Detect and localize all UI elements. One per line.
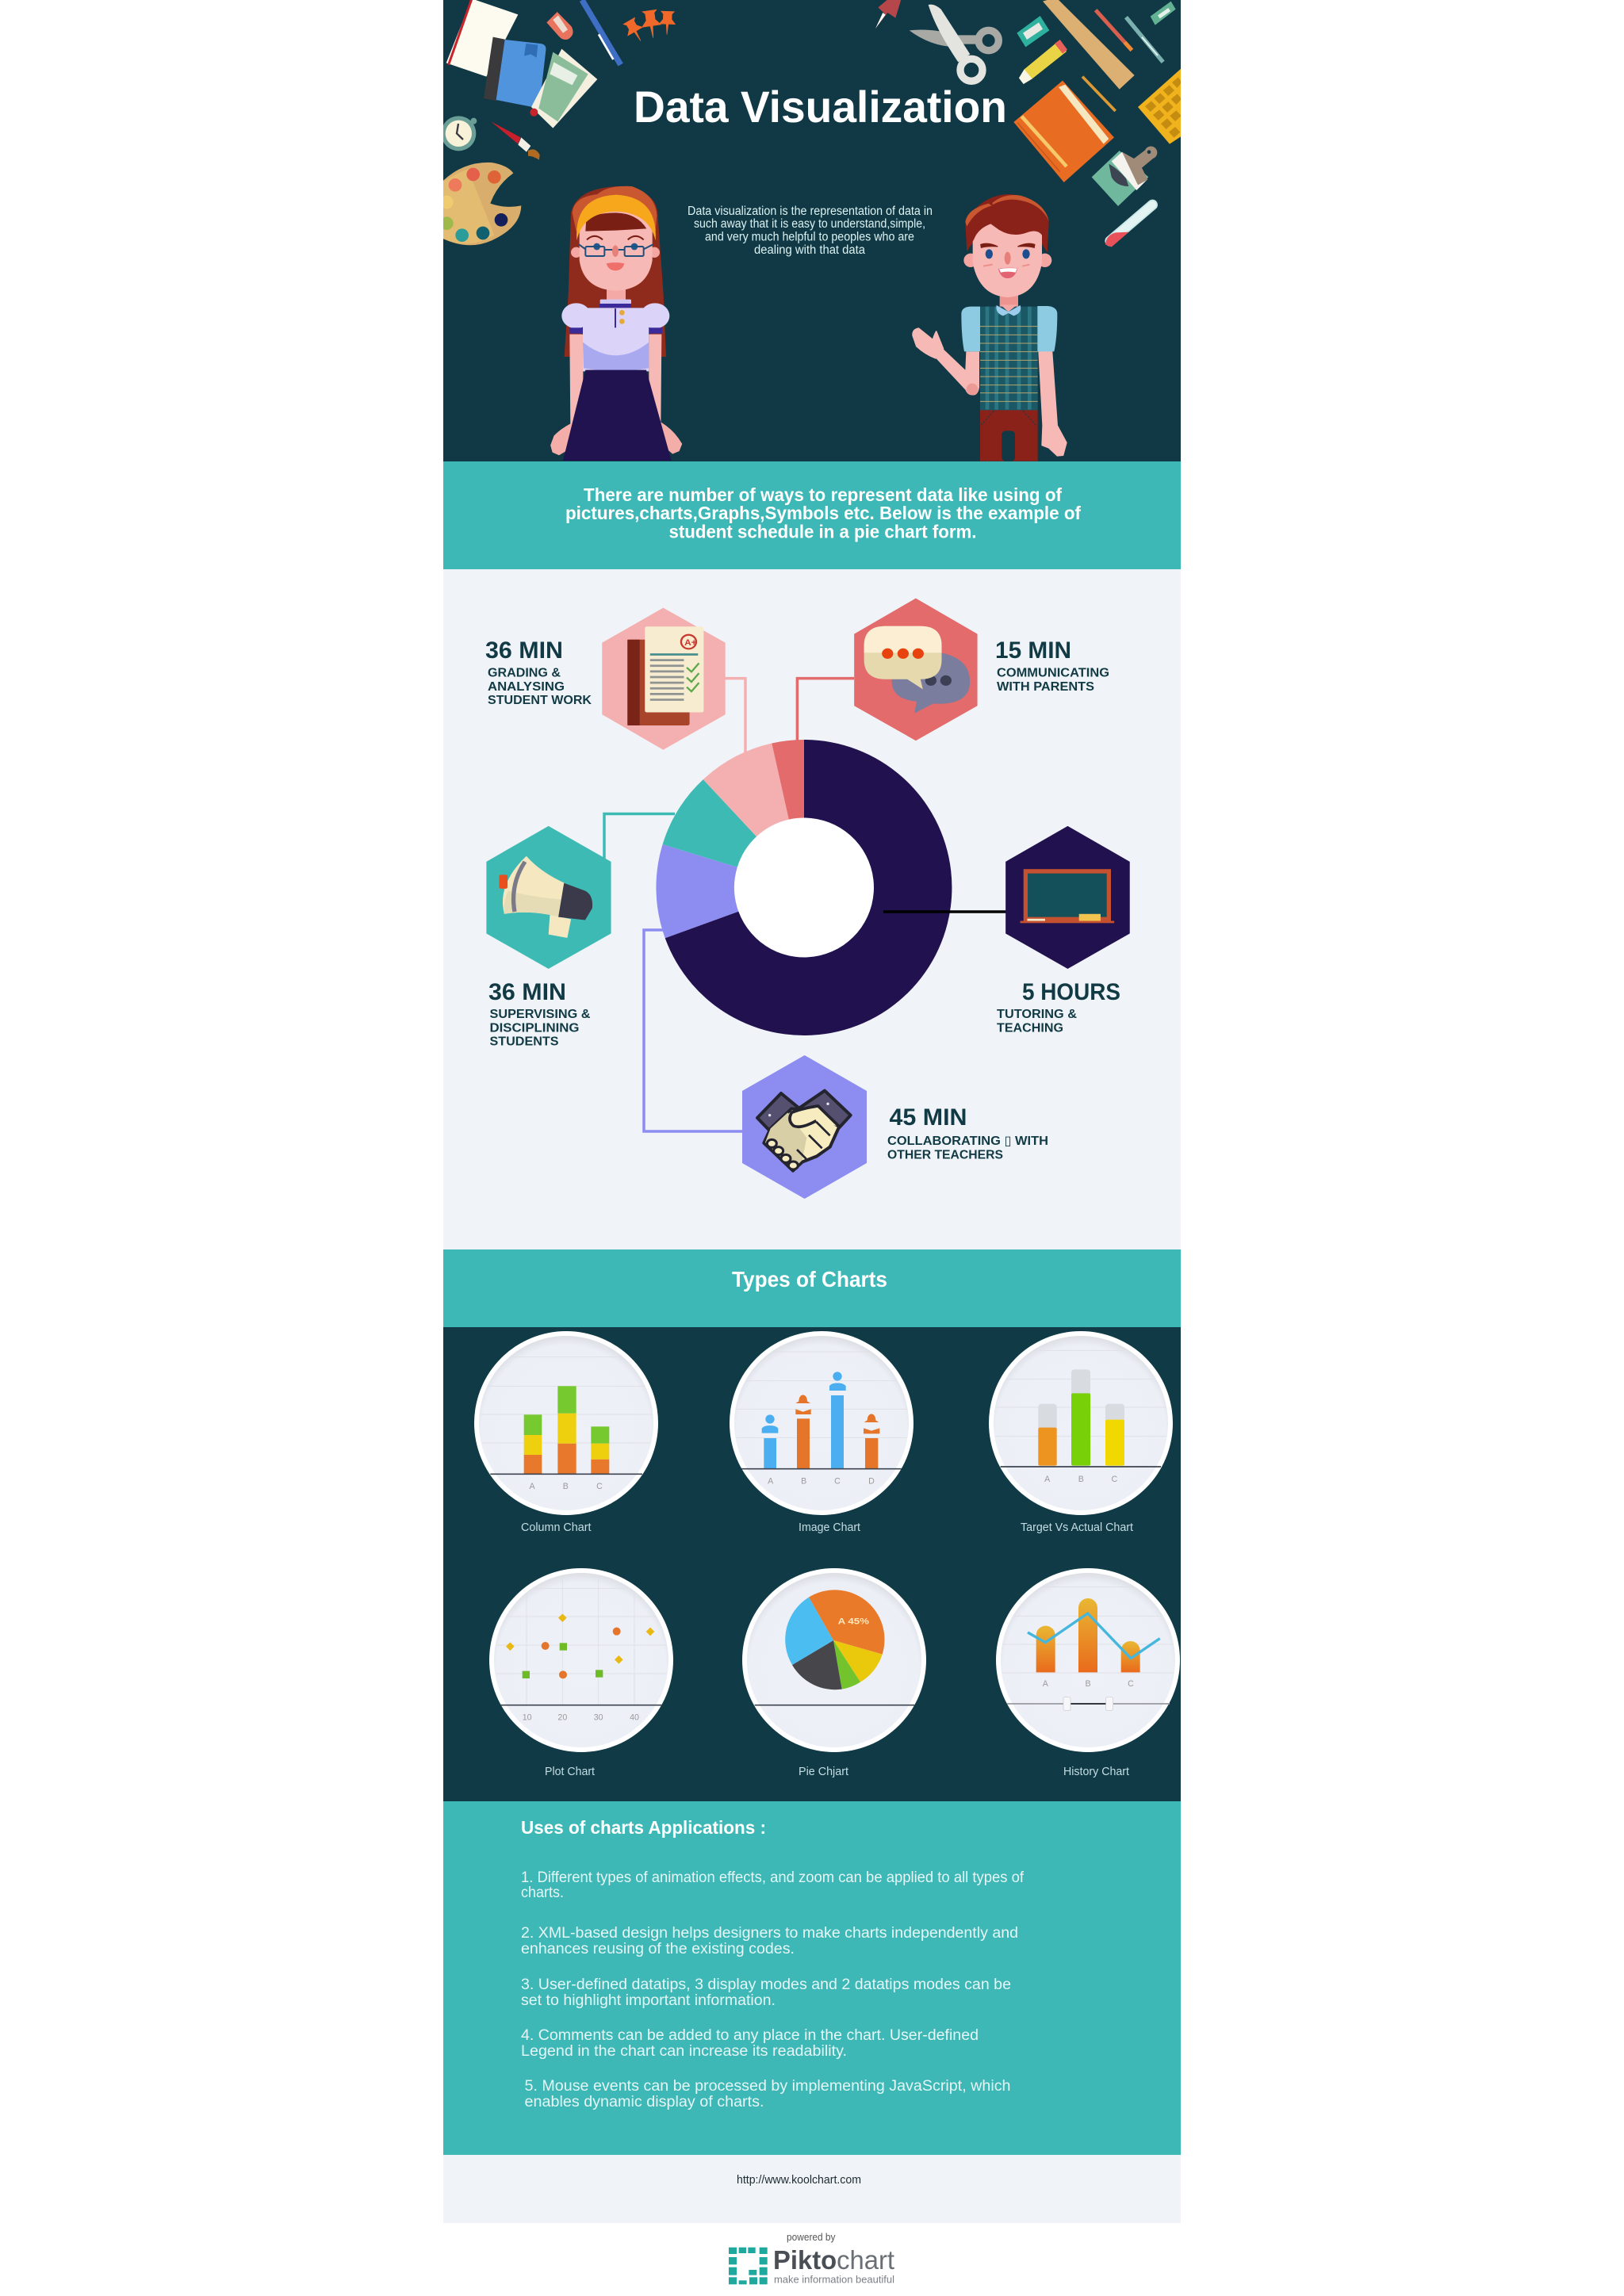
chart caption: Target Vs Actual Chart (1021, 1521, 1134, 1534)
uses list: 5. Mouse events can be processed by implementing JavaScript, which (525, 2078, 1010, 2095)
uses list: charts. (521, 1885, 564, 1901)
label: collaborating: COLLABORATING ▯ WITH (887, 1135, 1048, 1148)
uses list: 2. XML-based design helps designers to make charts independently and (521, 1925, 1018, 1942)
chart: history: C (1128, 1679, 1134, 1689)
chart: plot: 10 (523, 1712, 532, 1722)
icons: top-left stationery (440, 0, 676, 245)
label: collaborating: 45 MIN (890, 1104, 967, 1131)
hexagon: grading icon: A+ (684, 638, 697, 648)
uses list: 4. Comments can be added to any place in the chart. User-defined (521, 2027, 979, 2044)
piktochart branding: powered by (787, 2232, 836, 2243)
chart: image: C (834, 1476, 841, 1486)
panel: types of charts heading band (443, 1249, 1181, 1327)
chart caption: Column Chart (521, 1521, 592, 1534)
hexagon: teaching icon (1005, 826, 1130, 969)
hexagon: grading icon (602, 608, 726, 750)
label: grading: STUDENT WORK (488, 694, 592, 707)
chart: history (996, 1568, 1180, 1752)
chart caption: History Chart (1063, 1766, 1129, 1778)
piktochart branding (729, 2232, 894, 2285)
panel: student schedule donut (443, 569, 1181, 1249)
label: teaching: 5 HOURS (1022, 979, 1120, 1005)
donut hole (734, 818, 874, 958)
panel: uses of charts (443, 1801, 1181, 2155)
label: grading: GRADING & (488, 666, 561, 680)
label: supervising (488, 979, 591, 1048)
donut chart (656, 740, 952, 1035)
intro text: student schedule in a pie chart form. (669, 522, 977, 542)
chart: plot (489, 1568, 673, 1752)
uses list: Legend in the chart can increase its readability. (521, 2043, 847, 2060)
label: collaborating: OTHER TEACHERS (887, 1148, 1003, 1162)
label: teaching: TEACHING (997, 1021, 1063, 1035)
label: grading: 36 MIN (485, 637, 563, 664)
title: Data Visualization (634, 82, 1007, 132)
hero illustrations (440, 0, 1182, 461)
intro text: pictures,charts,Graphs,Symbols etc. Below is the example of (565, 503, 1081, 523)
uses list: enables dynamic display of charts. (525, 2094, 764, 2110)
label: grading: ANALYSING (488, 680, 565, 694)
label: supervising: STUDENTS (490, 1035, 559, 1048)
description text: Data visualization is the representation of data in (688, 205, 933, 218)
panel: source footer (443, 2155, 1181, 2223)
chart: target vs actual: B (1078, 1475, 1084, 1484)
piktochart branding: make information beautiful (774, 2274, 894, 2285)
source url: http://www.koolchart.com (737, 2173, 861, 2187)
hexagon: supervising icon (486, 826, 611, 969)
label: communicating: 15 MIN (995, 637, 1071, 664)
panel: intro band (443, 461, 1181, 569)
chart: plot: 40 (630, 1712, 639, 1722)
chart: pie: A 45% (838, 1617, 869, 1627)
chart caption: Pie Chjart (799, 1766, 848, 1778)
uses heading: Uses of charts Applications : (521, 1817, 766, 1838)
chart: image: B (801, 1476, 806, 1486)
heading: Types of Charts (732, 1267, 887, 1292)
chart: image: A (768, 1476, 774, 1486)
uses list: set to highlight important information. (521, 1992, 776, 2009)
description text (688, 205, 933, 257)
label: grading (485, 637, 592, 707)
label: communicating: COMMUNICATING (997, 666, 1109, 680)
illustration: boy (913, 194, 1067, 461)
uses list: 1. Different types of animation effects, and zoom can be applied to all types of (521, 1869, 1025, 1886)
label: supervising: DISCIPLINING (490, 1021, 579, 1035)
label: teaching: TUTORING & (997, 1008, 1077, 1021)
uses list (521, 1869, 1025, 2110)
uses list: 3. User-defined datatips, 3 display modes and 2 datatips modes can be (521, 1976, 1011, 1993)
chart: image (730, 1331, 914, 1515)
illustration: girl (551, 186, 681, 461)
chart: history: A (1043, 1679, 1049, 1689)
chart: column: B (563, 1482, 569, 1491)
chart: plot: 20 (557, 1712, 567, 1722)
chart: image: D (868, 1476, 875, 1486)
chart: column (474, 1331, 658, 1515)
uses list: enhances reusing of the existing codes. (521, 1941, 795, 1957)
leader line: teaching (883, 910, 1017, 913)
chart caption: Plot Chart (545, 1766, 595, 1778)
label: communicating (995, 637, 1109, 694)
chart: column: C (596, 1482, 603, 1491)
panel: hero header (440, 0, 1182, 461)
description text: such away that it is easy to understand,simple, (694, 217, 925, 231)
intro text (565, 484, 1081, 542)
chart: target vs actual (989, 1331, 1173, 1515)
chart: pie (742, 1568, 926, 1752)
wordmark: Piktochart (773, 2245, 894, 2275)
label: supervising: 36 MIN (488, 979, 566, 1005)
chart caption: Image Chart (799, 1521, 861, 1534)
label: communicating: WITH PARENTS (997, 680, 1094, 694)
description text: dealing with that data (754, 243, 865, 257)
hexagon: communicating icon (854, 599, 978, 740)
chart: target vs actual: A (1044, 1475, 1051, 1484)
panel: chart gallery (443, 1327, 1182, 1801)
chart: target vs actual: C (1111, 1475, 1117, 1484)
description text: and very much helpful to peoples who are (705, 230, 914, 244)
hexagon: collaborating icon (742, 1055, 867, 1199)
label: teaching (997, 979, 1120, 1035)
leader lines (604, 679, 854, 1131)
icon: piktochart logo (729, 2248, 768, 2284)
icons: top-right stationery (875, 0, 1182, 247)
label: supervising: SUPERVISING & (490, 1008, 591, 1021)
intro text: There are number of ways to represent data like using of (584, 484, 1062, 505)
label: collaborating (887, 1104, 1048, 1162)
chart: plot: 30 (594, 1712, 603, 1722)
chart: history: B (1085, 1679, 1091, 1689)
chart: column: A (529, 1482, 535, 1491)
